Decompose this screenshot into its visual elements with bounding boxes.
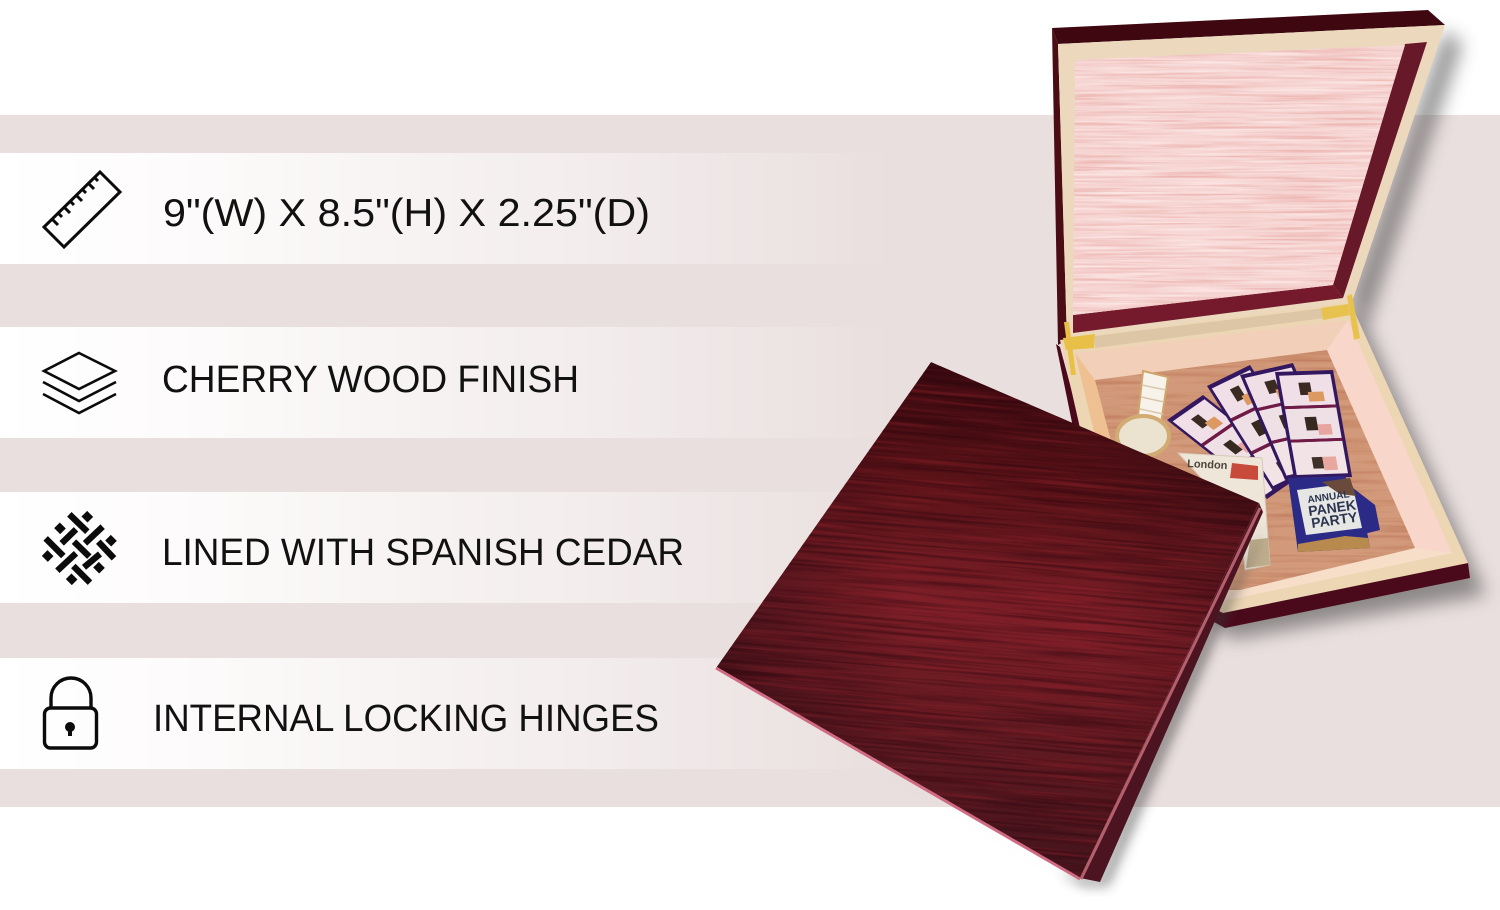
right wall — [1327, 320, 1452, 553]
party card: PANEK — [1307, 496, 1357, 519]
party card: PARTY — [1310, 509, 1359, 531]
hinge right — [1321, 294, 1360, 340]
detached lid shadow — [722, 525, 1266, 886]
hinge bar back rim — [1095, 308, 1325, 348]
pale inner wall — [1075, 320, 1452, 600]
cedar floor — [1090, 345, 1420, 595]
lid dark top edge — [1052, 10, 1445, 44]
product photo: open cherry wood box with lid — [678, 10, 1486, 903]
tan rim — [1060, 302, 1468, 613]
feature row: finish — [0, 327, 890, 438]
lid side — [1080, 503, 1263, 882]
feature row: dimensions — [0, 153, 890, 264]
dark outer wall — [1056, 344, 1470, 628]
text: dimensions: 9"(W) X 8.5"(H) X 2.25"(D) — [163, 192, 650, 235]
box shadows — [1200, 30, 1486, 640]
icon: ruler — [44, 172, 120, 247]
icon: layers — [43, 353, 116, 413]
front wall — [1226, 548, 1452, 600]
photo strips — [1167, 363, 1352, 499]
detached lid — [715, 362, 1263, 882]
watch — [1117, 371, 1169, 456]
background band — [0, 115, 1500, 807]
hinge left — [1063, 322, 1095, 375]
back wall — [1075, 320, 1348, 380]
lid purple inner wall — [1073, 285, 1343, 333]
lid dark left edge — [1052, 28, 1067, 345]
text: finish: CHERRY WOOD FINISH — [162, 359, 579, 401]
feature row: lining — [0, 492, 890, 603]
open lid of box — [1052, 10, 1445, 345]
icon: weave — [45, 514, 114, 583]
London card — [1178, 453, 1270, 570]
icon: lock — [44, 678, 96, 748]
party card: ANNUAL — [1307, 489, 1350, 506]
left wall — [1075, 353, 1150, 590]
party card — [1288, 476, 1380, 552]
lid pink cedar panel — [1073, 45, 1405, 315]
lid pink edges — [716, 668, 1080, 879]
lower box — [1056, 294, 1470, 628]
lid tan rim — [1058, 25, 1445, 340]
feature row: hinges — [0, 658, 890, 769]
London card: London — [1187, 458, 1228, 472]
text: hinges: INTERNAL LOCKING HINGES — [153, 698, 659, 740]
lid wood face — [716, 362, 1259, 878]
text: lining: LINED WITH SPANISH CEDAR — [162, 532, 684, 574]
